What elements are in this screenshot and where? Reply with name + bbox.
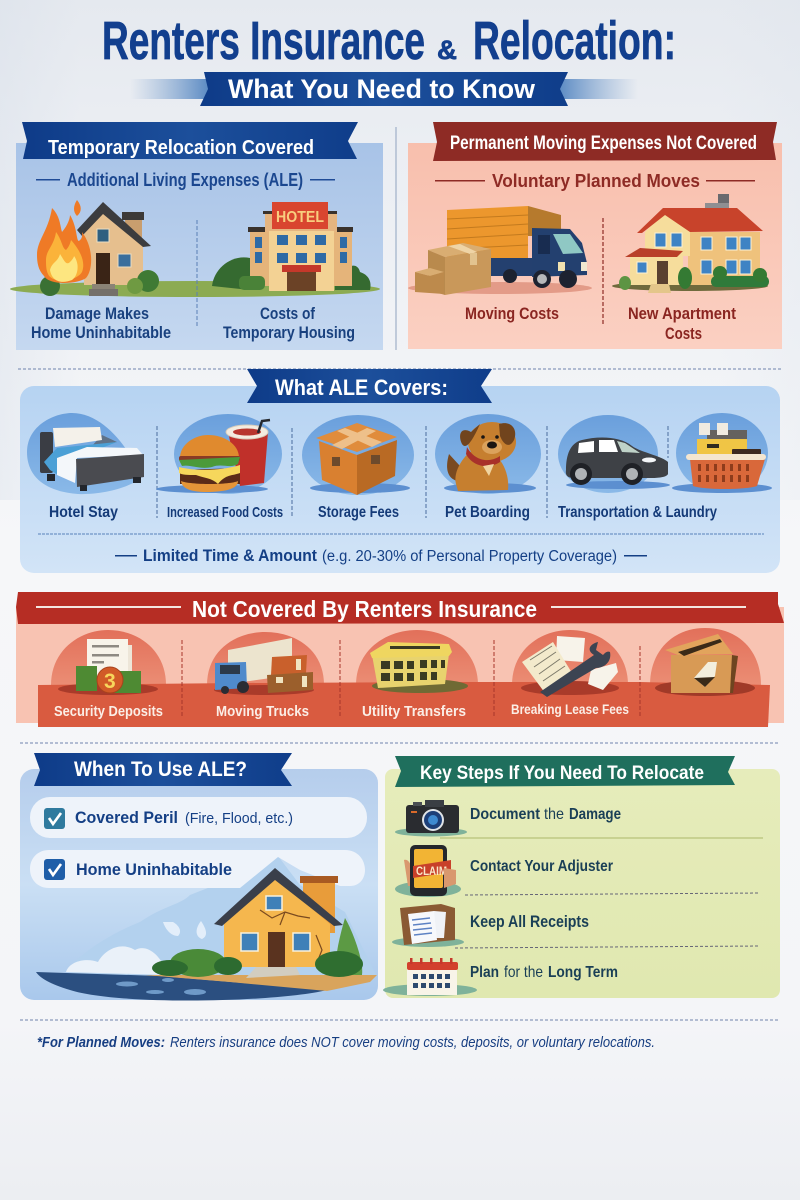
step: keep all receipts: [392, 904, 589, 947]
footnote: Renters insurance does NOT cover moving costs, deposits, or voluntary relocations.: [170, 1035, 655, 1051]
icon backdrop: security deposits: [51, 630, 166, 685]
icon: laundry basket: [672, 413, 772, 493]
note: limited time and amount: (e.g. 20-30% of Personal Property Coverage): [322, 548, 617, 565]
note: limited time and amount: Limited Time & Amount: [143, 547, 317, 565]
banner: when to use ALE: [34, 753, 292, 786]
labels: not covered items: Breaking Lease Fees: [511, 701, 629, 717]
checklist: home uninhabitable: [30, 850, 365, 888]
label: moving costs: Moving Costs: [465, 304, 559, 323]
step: plan for the long term: Long Term: [548, 964, 618, 981]
label: new apartment costs: [628, 304, 736, 343]
labels: coverage items: [49, 504, 717, 521]
column separator: [395, 127, 397, 350]
banner: key steps: Key Steps If You Need To Relocate: [420, 763, 704, 784]
labels: coverage items: Increased Food Costs: [167, 504, 283, 521]
banner: what ALE covers: [247, 369, 492, 403]
icon backdrop: moving trucks: [207, 632, 324, 685]
icon: storage box: [302, 415, 414, 495]
icon: moving truck with boxes: [408, 206, 592, 295]
icon: hotel bed: [27, 413, 144, 494]
footnote: [37, 1034, 655, 1051]
icon backdrop: utility transfers: [356, 630, 478, 685]
banner: temporary relocation: [22, 122, 358, 159]
panel: not covered by renters insurance: [16, 592, 784, 727]
labels: coverage items: Hotel Stay: [49, 504, 118, 521]
banner: what ALE covers: What ALE Covers:: [275, 375, 448, 400]
icon: damaged house by water: [36, 868, 377, 1001]
title: Renters Insurance: [102, 11, 425, 71]
dividers: [182, 640, 640, 716]
icon art: utility transfers: [370, 642, 468, 693]
icon: dog: [435, 414, 541, 494]
icon art: security deposits: 3: [104, 670, 116, 693]
note: limited time and amount: [115, 547, 647, 565]
step: keep all receipts: Keep All Receipts: [470, 912, 589, 931]
label: damage makes home uninhabitable: Home Uninhabitable: [31, 324, 171, 342]
panel: permanent moving expenses not covered: [408, 122, 782, 349]
step: plan for the long term: for the: [504, 964, 543, 981]
step: plan for the long term: Plan: [470, 964, 499, 981]
icon: hotel: HOTEL: [276, 209, 324, 226]
footnote: *For Planned Moves:: [37, 1034, 165, 1051]
banner: key steps: [395, 756, 735, 787]
subheading: voluntary planned moves: Voluntary Planned Moves: [492, 170, 700, 191]
checklist: covered peril: Covered Peril: [75, 808, 178, 827]
label: damage makes home uninhabitable: [31, 305, 171, 342]
label: new apartment costs: New Apartment: [628, 304, 736, 323]
checklist: home uninhabitable: Home Uninhabitable: [76, 860, 232, 879]
label: damage makes home uninhabitable: Damage Makes: [45, 305, 149, 323]
labels: not covered items: Moving Trucks: [216, 704, 309, 720]
icon art: breaking lease fees: [521, 636, 619, 697]
subtitle ribbon: What You Need to Know: [228, 74, 535, 104]
step: contact your adjuster: Contact Your Adjuster: [470, 858, 613, 875]
checklist: covered peril: (Fire, Flood, etc.): [185, 810, 293, 827]
step: contact your adjuster: CLAIM: [416, 866, 447, 878]
checklist: covered peril: [30, 797, 367, 838]
icon: apartment house: [612, 194, 769, 293]
title: &: [437, 35, 457, 65]
icon: hotel: [212, 202, 371, 291]
subheading: additional living expenses: Additional Living Expenses (ALE): [67, 170, 303, 190]
icon: burger and drink: [156, 414, 282, 494]
icon art: envelope box: [655, 634, 755, 696]
divider: [602, 218, 604, 326]
labels: coverage items: Transportation & Laundry: [558, 504, 717, 521]
scene backdrop: mountain: [66, 856, 376, 985]
subtitle ribbon: [130, 72, 638, 106]
icon backdrop: breaking lease: [512, 630, 628, 685]
label: costs of temporary housing: Costs of: [260, 305, 315, 323]
title: Relocation:: [473, 11, 676, 71]
step: plan for the long term: [383, 958, 618, 996]
label: new apartment costs: Costs: [665, 324, 702, 343]
panel: when to use ALE: [20, 753, 378, 1001]
panel: temporary relocation covered: [10, 122, 383, 350]
icon art: moving trucks: [214, 638, 314, 695]
icon art: security deposits: [58, 639, 158, 695]
labels: coverage items: Pet Boarding: [445, 504, 530, 521]
labels: not covered items: [54, 701, 629, 720]
step: document the damage: the: [544, 806, 564, 823]
banner: permanent moving: [433, 122, 777, 161]
banner: not covered: Not Covered By Renters Insurance: [192, 596, 537, 622]
labels: not covered items: Utility Transfers: [362, 704, 466, 720]
icon: car: [558, 415, 670, 493]
panel: key steps: [383, 756, 780, 998]
panel: what ALE covers: [20, 369, 780, 573]
divider: [196, 220, 198, 326]
ground: [10, 281, 380, 297]
labels: coverage items: Storage Fees: [318, 504, 399, 521]
step: document the damage: Damage: [569, 806, 621, 823]
banner: not covered: [16, 592, 784, 624]
label: costs of temporary housing: [223, 305, 355, 342]
icon: house on fire: [37, 200, 159, 296]
step: document the damage: Document: [470, 806, 541, 823]
banner: temporary relocation: Temporary Relocation Covered: [48, 136, 314, 159]
banner: when to use ALE: When To Use ALE?: [74, 758, 247, 781]
icon backdrop: final item: [650, 628, 761, 685]
step: document the damage: [395, 800, 621, 836]
label: costs of temporary housing: Temporary Housing: [223, 324, 355, 342]
step: contact your adjuster: [395, 845, 613, 897]
labels: not covered items: Security Deposits: [54, 704, 163, 720]
bottom strip: [38, 682, 770, 727]
